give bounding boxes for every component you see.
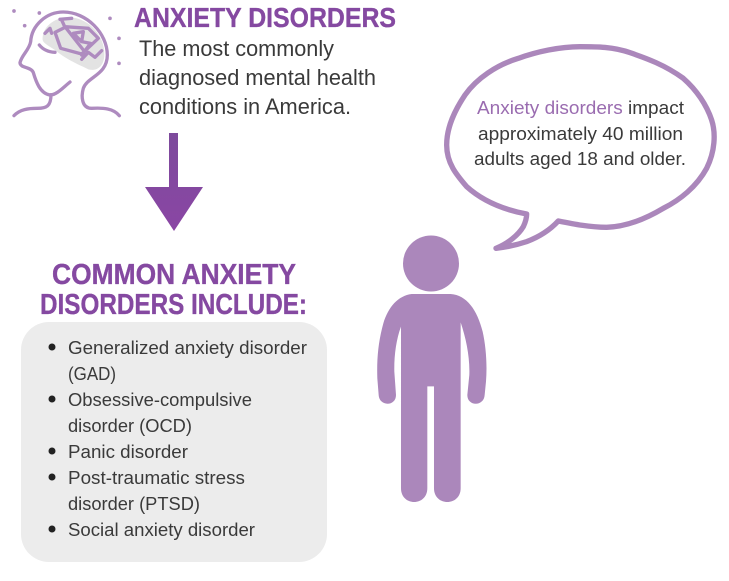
speech bubble (447, 47, 714, 248)
bubble text: Anxiety disorders impact (477, 97, 684, 118)
list text: (GAD) (68, 363, 116, 384)
intro text (139, 36, 376, 119)
intro text: conditions in America. (139, 94, 351, 119)
person head (403, 236, 459, 292)
list text: Social anxiety disorder (68, 519, 255, 540)
section heading: DISORDERS INCLUDE: (40, 289, 307, 321)
bubble text (474, 97, 686, 169)
section heading (40, 259, 307, 321)
list text: disorder (PTSD) (68, 493, 200, 514)
icon: head with tangled brain (12, 9, 121, 116)
bubble text: adults aged 18 and older. (474, 148, 686, 169)
list text: Generalized anxiety disorder (68, 337, 307, 358)
list text: disorder (OCD) (68, 415, 192, 436)
intro text: diagnosed mental health (139, 65, 376, 90)
intro text: The most commonly (139, 36, 334, 61)
section heading: COMMON ANXIETY (52, 259, 296, 291)
list text: Panic disorder (68, 441, 188, 462)
list bullets (48, 344, 56, 532)
icon: standing person (377, 236, 486, 502)
title: ANXIETY DISORDERS (134, 2, 396, 33)
bubble text: approximately 40 million (478, 123, 683, 144)
person body (377, 294, 486, 502)
list text: Post-traumatic stress (68, 467, 245, 488)
list text (68, 337, 307, 540)
panel background (21, 322, 327, 562)
list text: Obsessive-compulsive (68, 389, 252, 410)
arrow pointing down (145, 133, 203, 231)
panel: common disorders list (21, 322, 327, 562)
